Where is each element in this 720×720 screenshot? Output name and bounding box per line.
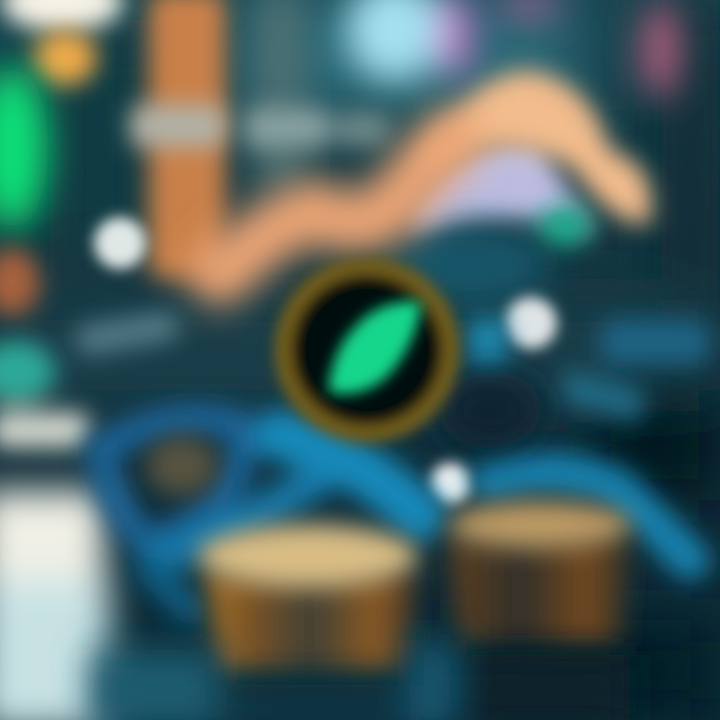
barrel top xyxy=(198,524,418,588)
right barrel xyxy=(448,501,632,645)
grey-teal streaks xyxy=(73,309,710,423)
barrel body xyxy=(448,535,632,645)
orange price line xyxy=(220,140,450,275)
orange column xyxy=(148,0,226,280)
dark eye in ribbon xyxy=(146,436,218,496)
grey horizontal band xyxy=(130,105,390,148)
grey column xyxy=(255,0,305,190)
lavender area under the line xyxy=(405,139,595,240)
blue ribbons xyxy=(100,419,690,610)
green leaf xyxy=(328,301,422,394)
right coin ring glow xyxy=(438,372,542,448)
bottom reflection xyxy=(90,640,630,720)
green shape left edge xyxy=(0,66,48,230)
orange blob left xyxy=(0,248,40,316)
barrel body xyxy=(205,570,418,672)
central coin xyxy=(283,266,451,434)
white dots xyxy=(94,217,557,504)
coin ring xyxy=(283,266,451,434)
left barrel xyxy=(198,524,418,672)
white glow bottom left xyxy=(0,490,110,720)
teal mound xyxy=(390,227,550,303)
lamp: white shade and orange glow xyxy=(0,0,124,86)
top light-blue glow xyxy=(345,0,680,100)
orange filled hill xyxy=(420,70,652,225)
green accent on line xyxy=(539,206,591,246)
teal and white bands left xyxy=(0,340,90,448)
barrel top xyxy=(448,501,632,549)
